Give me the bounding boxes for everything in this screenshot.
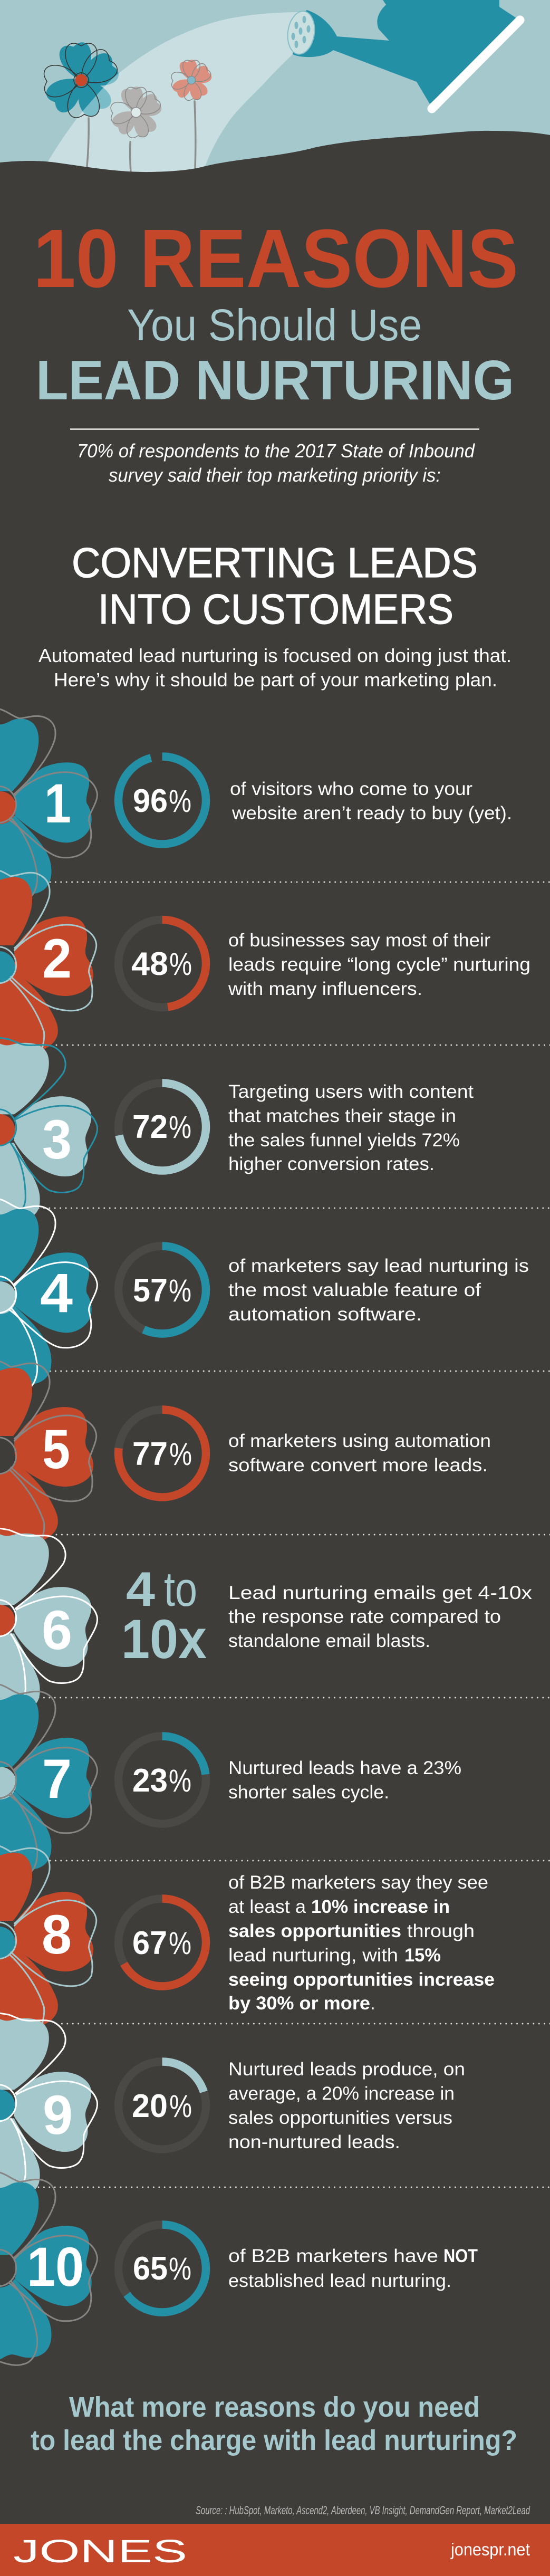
stat 77%	[132, 1436, 192, 1472]
text reason 1	[230, 779, 512, 823]
text reason 9: non-nurtured leads.	[228, 2132, 400, 2152]
title: lead nurturing: LEAD NURTURING	[36, 349, 514, 411]
text reason 2: of businesses say most of their	[228, 930, 490, 951]
flower 5	[0, 1359, 97, 1545]
website url: jonespr.net	[450, 2540, 530, 2559]
number 7: 7	[42, 1748, 72, 1810]
stat 96%: %	[169, 783, 191, 819]
stat 4 to 10x	[121, 1563, 207, 1670]
number 10: 10	[27, 2236, 84, 2298]
survey intro text	[77, 440, 475, 486]
number 5: 5	[42, 1419, 70, 1480]
text reason 5: software convert more leads.	[228, 1455, 488, 1476]
text reason 10: NOT	[443, 2246, 478, 2266]
stat 57%: %	[169, 1273, 191, 1308]
ring 67%	[118, 1899, 206, 1986]
stat 4 to 10x: to	[164, 1563, 197, 1616]
reason 1	[0, 707, 512, 902]
text reason 8: at least a	[228, 1897, 306, 1917]
reason 9	[0, 2012, 465, 2196]
text reason 3: that matches their stage in	[228, 1106, 456, 1126]
text reason 5: of marketers using automation	[228, 1431, 491, 1451]
survey intro text: survey said their top marketing priority is:	[109, 464, 441, 486]
ring 77%	[118, 1410, 206, 1497]
subtitle: you should use: You Should Use	[127, 300, 422, 350]
text reason 1: website aren’t ready to buy (yet).	[231, 803, 512, 823]
text reason 9: sales opportunities versus	[228, 2108, 452, 2128]
text reason 6: Lead nurturing emails get 4-10x	[228, 1583, 533, 1603]
closing question	[31, 2391, 517, 2456]
text reason 2: leads require “long cycle” nurturing	[228, 954, 530, 975]
stat 67%	[132, 1925, 191, 1961]
flower: grey petals	[110, 85, 163, 139]
flower stems	[87, 101, 196, 172]
stat 4 to 10x: 10x	[121, 1608, 207, 1670]
text reason 4: automation software.	[228, 1304, 422, 1325]
footer bar	[0, 2524, 550, 2576]
stat 96%	[133, 783, 191, 819]
text reason 10: of B2B marketers have	[228, 2246, 438, 2266]
heading: converting leads into customers	[72, 539, 478, 633]
ring 65%	[118, 2225, 206, 2312]
water beam	[48, 12, 298, 179]
text reason 7	[228, 1758, 461, 1803]
text reason 3	[228, 1081, 474, 1174]
stat 20%	[132, 2088, 192, 2124]
stat 48%	[131, 946, 192, 982]
dark hill wave	[0, 131, 550, 190]
text reason 9	[228, 2059, 465, 2152]
text reason 9: Nurtured leads produce, on	[228, 2059, 465, 2080]
text reason 3: the sales funnel yields 72%	[228, 1130, 460, 1151]
flower: teal petals	[43, 41, 121, 120]
intro paragraph: Automated lead nurturing is focused on doing just that.	[38, 645, 512, 666]
number 9: 9	[43, 2084, 73, 2146]
ring 23%	[118, 1736, 206, 1824]
text reason 7: shorter sales cycle.	[228, 1782, 389, 1803]
flower 7	[0, 1683, 97, 1877]
number 2: 2	[42, 928, 72, 990]
number 3: 3	[42, 1109, 72, 1171]
flower 3	[0, 1036, 98, 1221]
flower 1	[0, 707, 97, 902]
closing question: What more reasons do you need	[69, 2391, 480, 2423]
text reason 6: the response rate compared to	[228, 1606, 501, 1627]
flower 6	[0, 1527, 98, 1711]
title: 10 reasons: 10 REASONS	[33, 213, 518, 305]
stat 65%: %	[169, 2251, 191, 2286]
reason 6	[0, 1527, 533, 1711]
header illustration	[0, 0, 550, 190]
reason 10	[0, 2171, 478, 2365]
closing question: to lead the charge with lead nurturing?	[31, 2425, 517, 2456]
flower 4	[0, 1198, 97, 1392]
text reason 8: sales opportunities	[228, 1921, 401, 1941]
flower outline: teal	[44, 43, 121, 118]
stat 67%: %	[169, 1926, 191, 1961]
flower outline: coral	[171, 60, 213, 101]
text reason 10: established lead nurturing.	[228, 2271, 451, 2291]
ring 72%	[118, 1083, 206, 1171]
text reason 3: Targeting users with content	[228, 1081, 474, 1102]
stat 23%: %	[169, 1763, 191, 1798]
stat 67%: 67	[132, 1925, 167, 1961]
stat 72%: %	[169, 1109, 191, 1145]
reason 8	[0, 1844, 495, 2030]
stat 20%: 20	[132, 2088, 168, 2124]
text reason 8: of B2B marketers say they see	[228, 1872, 488, 1893]
number 4: 4	[40, 1262, 73, 1324]
text reason 10	[228, 2246, 478, 2291]
intro paragraph	[38, 645, 512, 691]
flower 2	[0, 869, 97, 1055]
flower 10	[0, 2171, 97, 2365]
stat 23%: 23	[132, 1763, 168, 1799]
text reason 8: through	[407, 1921, 475, 1941]
text reason 8: 10% increase in	[311, 1897, 450, 1917]
text reason 8: .	[370, 1993, 375, 2014]
text reason 5	[228, 1431, 491, 1476]
text reason 9: average, a 20% increase in	[228, 2083, 455, 2104]
text reason 3: higher conversion rates.	[228, 1154, 435, 1174]
heading: converting leads into customers: INTO CUSTOMERS	[98, 586, 453, 633]
ring 96%	[118, 756, 206, 844]
reason 4	[0, 1198, 529, 1392]
stat 65%: 65	[133, 2251, 168, 2287]
text reason 6: standalone email blasts.	[228, 1631, 430, 1651]
text reason 4: of marketers say lead nurturing is	[228, 1256, 529, 1276]
stat 48%: 48	[131, 946, 168, 982]
stat 4 to 10x: 4	[126, 1563, 155, 1616]
stat 72%: 72	[132, 1109, 168, 1145]
stat 57%: 57	[133, 1272, 168, 1309]
stat 20%: %	[169, 2089, 192, 2124]
text reason 7: Nurtured leads have a 23%	[228, 1758, 461, 1778]
text reason 2: with many influencers.	[228, 979, 422, 999]
text reason 8	[228, 1872, 495, 2014]
stat 77%: %	[169, 1437, 192, 1472]
stat 96%: 96	[133, 783, 168, 819]
heading: converting leads into customers: CONVERTING LEADS	[72, 539, 478, 586]
ring 57%	[118, 1246, 206, 1334]
text reason 8: by 30% or more	[228, 1993, 370, 2014]
text reason 1: of visitors who come to your	[230, 779, 472, 799]
watering can	[285, 0, 520, 109]
ring 20%	[118, 2062, 206, 2149]
stat 77%: 77	[132, 1436, 168, 1472]
reason 5	[0, 1359, 491, 1545]
flower 8	[0, 1844, 97, 2030]
stat 72%	[132, 1109, 191, 1145]
survey intro text: 70% of respondents to the 2017 State of Inbound	[77, 440, 475, 462]
number 6: 6	[42, 1600, 72, 1661]
reason 7	[0, 1683, 461, 1877]
logo: JONES: JONES	[13, 2533, 187, 2569]
text reason 8: seeing opportunities increase	[228, 1969, 495, 1990]
intro paragraph: Here’s why it should be part of your marketing plan.	[54, 669, 497, 691]
number 1: 1	[44, 773, 71, 835]
reason 2	[0, 869, 530, 1055]
text reason 2	[228, 930, 530, 999]
text reason 8: 15%	[404, 1945, 441, 1966]
flower 9	[0, 2012, 98, 2196]
stat 48%: %	[169, 946, 192, 982]
flower outline: grey	[111, 87, 163, 138]
stat 65%	[133, 2251, 191, 2287]
stat 57%	[133, 1272, 191, 1309]
text reason 8: lead nurturing, with	[228, 1945, 398, 1966]
number 8: 8	[42, 1904, 72, 1966]
ring 48%	[118, 920, 206, 1008]
flower: coral petals	[171, 59, 213, 102]
reason 3	[0, 1036, 474, 1221]
text reason 4	[228, 1256, 529, 1325]
text reason 4: the most valuable feature of	[228, 1280, 481, 1300]
text reason 6	[228, 1583, 533, 1651]
stat 23%	[132, 1763, 191, 1799]
